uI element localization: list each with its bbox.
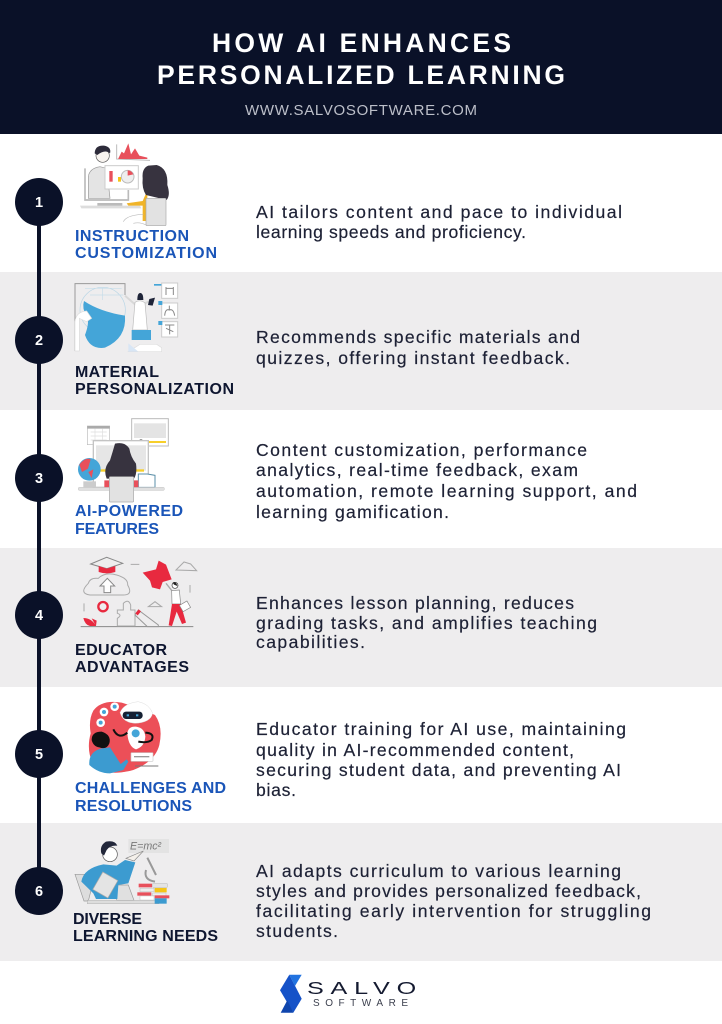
heading: diverse learning needs xyxy=(73,911,218,945)
heading: diverse learning needs: LEARNING NEEDS xyxy=(73,928,218,945)
text: challenges and resolutions: securing student data, and preventing AI xyxy=(256,760,621,780)
step 5 marker xyxy=(15,730,63,778)
text: diverse learning needs: styles and provides personalized feedback, xyxy=(256,881,641,901)
title: HOW AI ENHANCES xyxy=(212,28,511,58)
step 4 marker xyxy=(15,591,63,639)
heading: ai-powered features xyxy=(75,503,183,538)
step 6 marker: 6 xyxy=(35,884,43,900)
text: instruction customization: learning speeds and proficiency. xyxy=(256,222,526,242)
step 1 marker xyxy=(15,178,63,226)
timeline xyxy=(15,178,63,915)
text: challenges and resolutions: bias. xyxy=(256,780,296,800)
text: material personalization: quizzes, offering instant feedback. xyxy=(256,348,570,368)
step 1 marker: 1 xyxy=(35,195,43,211)
text: ai-powered features xyxy=(256,440,637,522)
text: educator advantages: grading tasks, and amplifies teaching xyxy=(256,613,597,633)
heading: challenges and resolutions: CHALLENGES AND xyxy=(75,780,226,797)
text: diverse learning needs: facilitating early intervention for struggling xyxy=(256,901,651,921)
heading: educator advantages xyxy=(75,642,189,676)
icon: man emerging from laptop: E=mc² xyxy=(130,841,162,853)
icon: doctor with anatomy charts xyxy=(75,283,178,352)
text: ai-powered features: analytics, real-time feedback, exam xyxy=(256,460,578,480)
icon: logo mark xyxy=(280,975,302,1013)
heading: ai-powered features: AI-POWERED xyxy=(75,503,183,520)
text: educator advantages: capabilities. xyxy=(256,632,365,652)
heading: material personalization xyxy=(75,364,234,398)
step 2 marker xyxy=(15,316,63,364)
website url: WWW.SALVOSOFTWARE.COM xyxy=(245,102,477,119)
logo xyxy=(280,975,416,1013)
heading: instruction customization xyxy=(75,228,217,262)
header band xyxy=(0,0,722,134)
text: diverse learning needs xyxy=(256,861,651,941)
heading: material personalization: MATERIAL xyxy=(75,364,159,381)
heading: educator advantages: ADVANTAGES xyxy=(75,659,189,676)
row background stripes xyxy=(0,272,722,961)
text: challenges and resolutions: quality in AI-recommended content, xyxy=(256,740,574,760)
heading: material personalization: PERSONALIZATION xyxy=(75,381,234,398)
step 3 marker: 3 xyxy=(35,471,43,487)
text: challenges and resolutions: Educator training for AI use, maintaining xyxy=(256,719,626,739)
text: ai-powered features: learning gamification. xyxy=(256,502,449,522)
text: ai-powered features: Content customization, performance xyxy=(256,440,587,460)
icon: teacher on screen with student xyxy=(80,143,169,226)
logo: SALVO xyxy=(307,978,416,998)
title xyxy=(157,28,565,90)
text: educator advantages xyxy=(256,593,597,652)
step 2 marker: 2 xyxy=(35,333,43,349)
text: material personalization xyxy=(256,327,580,368)
text: ai-powered features: automation, remote learning support, and xyxy=(256,481,637,501)
text: educator advantages: Enhances lesson planning, reduces xyxy=(256,593,574,613)
text: material personalization: Recommends specific materials and xyxy=(256,327,580,347)
text: instruction customization: AI tailors content and pace to individual xyxy=(256,202,622,222)
heading: instruction customization: CUSTOMIZATION xyxy=(75,245,217,262)
step 6 marker xyxy=(15,867,63,915)
heading: ai-powered features: FEATURES xyxy=(75,521,159,538)
text: instruction customization xyxy=(256,202,622,242)
heading: instruction customization: INSTRUCTION xyxy=(75,228,189,245)
step 4 marker: 4 xyxy=(35,608,43,624)
text: challenges and resolutions xyxy=(256,719,626,800)
icon: student at computer with globe xyxy=(78,419,168,502)
text: diverse learning needs: students. xyxy=(256,921,338,941)
icon: graduation cloud and puzzle xyxy=(81,557,197,627)
heading: diverse learning needs: DIVERSE xyxy=(73,911,142,928)
text: diverse learning needs: AI adapts curriculum to various learning xyxy=(256,861,621,881)
icon: man emerging from laptop xyxy=(75,839,169,904)
logo: SOFTWARE xyxy=(313,998,408,1009)
icon: robot helping person xyxy=(89,702,161,773)
title: PERSONALIZED LEARNING xyxy=(157,60,565,90)
step 5 marker: 5 xyxy=(35,747,43,763)
heading: challenges and resolutions xyxy=(75,780,226,815)
heading: challenges and resolutions: RESOLUTIONS xyxy=(75,798,192,815)
step 3 marker xyxy=(15,454,63,502)
heading: educator advantages: EDUCATOR xyxy=(75,642,167,659)
